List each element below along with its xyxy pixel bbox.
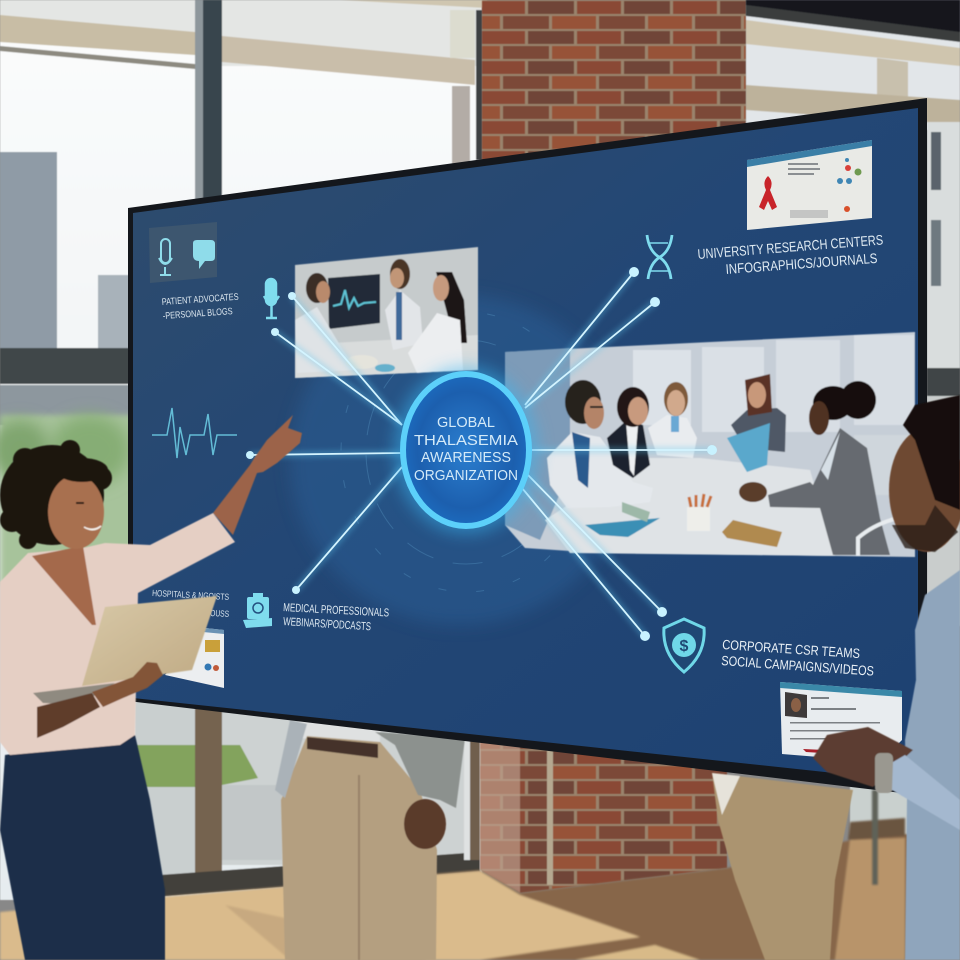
- pencil cup: [687, 494, 711, 531]
- window blinds: [0, 0, 487, 166]
- person: woman in grey at rear: [731, 374, 786, 452]
- text: partly hidden label: OUSS: [210, 608, 229, 619]
- hand: [813, 727, 913, 787]
- hub label: GLOBAL: [437, 415, 495, 431]
- icon: camera: [243, 593, 272, 628]
- background: left window wall: [0, 0, 487, 900]
- photo: doctors at monitor: [295, 247, 478, 378]
- screen surface: [133, 108, 918, 782]
- card: hidden panel lower-left: [165, 628, 224, 688]
- hair: [0, 440, 112, 549]
- neck and chest: [32, 546, 96, 625]
- text: university research centers: [697, 231, 884, 277]
- soft glow behind centre: [290, 295, 630, 625]
- text: patient advocates: [161, 292, 239, 322]
- background: brick pillar: [480, 0, 746, 893]
- hand on laptop: [92, 662, 163, 707]
- forearm holding laptop: [37, 693, 100, 738]
- glass DNA model: [727, 423, 770, 472]
- text: university research centers: UNIVERSITY RESEARCH CENTERS: [697, 231, 884, 262]
- text: partly hidden label: [152, 588, 229, 619]
- text: medical professionals: WEBINARS/PODCASTS: [283, 616, 372, 633]
- hub label: ORGANIZATION: [414, 468, 518, 484]
- text: university research centers: INFOGRAPHICS/JOURNALS: [725, 250, 878, 277]
- text: partly hidden label: HOSPITALS & NGOISTS: [152, 588, 229, 602]
- person: woman in white: [648, 382, 697, 458]
- text: medical professionals: [283, 602, 390, 633]
- icon: DNA helix: [647, 235, 672, 279]
- icon: chat bubble: [193, 240, 215, 269]
- text: corporate CSR teams: CORPORATE CSR TEAMS: [722, 637, 860, 661]
- central hub circle: [394, 366, 538, 534]
- background: right window: [746, 0, 960, 835]
- person: man behind screen in khakis, right: [712, 773, 853, 960]
- connector lines to hub: [246, 267, 717, 641]
- card: personal profile: [780, 682, 902, 762]
- notebook: [722, 520, 782, 547]
- card: research infographic: [747, 140, 872, 230]
- person: man in white coat: [547, 380, 653, 508]
- window frames: [0, 0, 482, 384]
- text: corporate CSR teams: [721, 637, 874, 679]
- person: woman in black blazer: [607, 387, 650, 478]
- screen bezel: [128, 98, 927, 796]
- laptop: [33, 596, 217, 704]
- trees outside window: [0, 415, 135, 585]
- text: patient advocates: -PERSONAL BLOGS: [162, 306, 233, 322]
- shirt: [905, 570, 960, 960]
- person: woman in grey suit: [739, 381, 890, 555]
- text: patient advocates: PATIENT ADVOCATES: [161, 292, 239, 308]
- watch: [875, 753, 893, 793]
- icon: heartbeat pulse: [152, 408, 237, 458]
- panel: large display screen: [128, 98, 927, 796]
- view through lower window panes: [135, 695, 480, 897]
- hub label: THALASEMIA: [414, 433, 518, 449]
- hair: [903, 395, 960, 510]
- face: [48, 458, 108, 549]
- distant buildings: [0, 152, 130, 425]
- icon: shield with dollar: $: [680, 638, 689, 655]
- conference table: [545, 458, 835, 556]
- text: corporate CSR teams: SOCIAL CAMPAIGNS/VIDEOS: [721, 653, 874, 679]
- person: man behind screen in jacket and khakis: [275, 720, 465, 960]
- cuff and sleeve: [892, 755, 960, 830]
- jeans: [0, 735, 165, 960]
- hub label: AWARENESS: [421, 450, 511, 466]
- icon: microphone small: [159, 239, 172, 275]
- icon: microphone: [264, 279, 279, 318]
- beard: [892, 505, 958, 552]
- person: woman presenting with laptop: [0, 415, 302, 960]
- text: medical professionals: MEDICAL PROFESSIONALS: [283, 602, 390, 620]
- panel: patient advocates icon box: [149, 222, 217, 283]
- faint concentric rings: [341, 312, 591, 592]
- forearm and hand pointing: [213, 415, 302, 535]
- colourful papers: [585, 518, 660, 537]
- photo: conference room team: [505, 332, 915, 557]
- hub label: [414, 415, 518, 484]
- blouse: [0, 513, 235, 755]
- background: wooden floor: [0, 790, 960, 960]
- icon: red ribbon: [759, 176, 777, 210]
- head: [889, 428, 960, 552]
- chair: [858, 518, 898, 556]
- icon: shield with dollar: [664, 619, 704, 672]
- person: man on right: [813, 395, 960, 960]
